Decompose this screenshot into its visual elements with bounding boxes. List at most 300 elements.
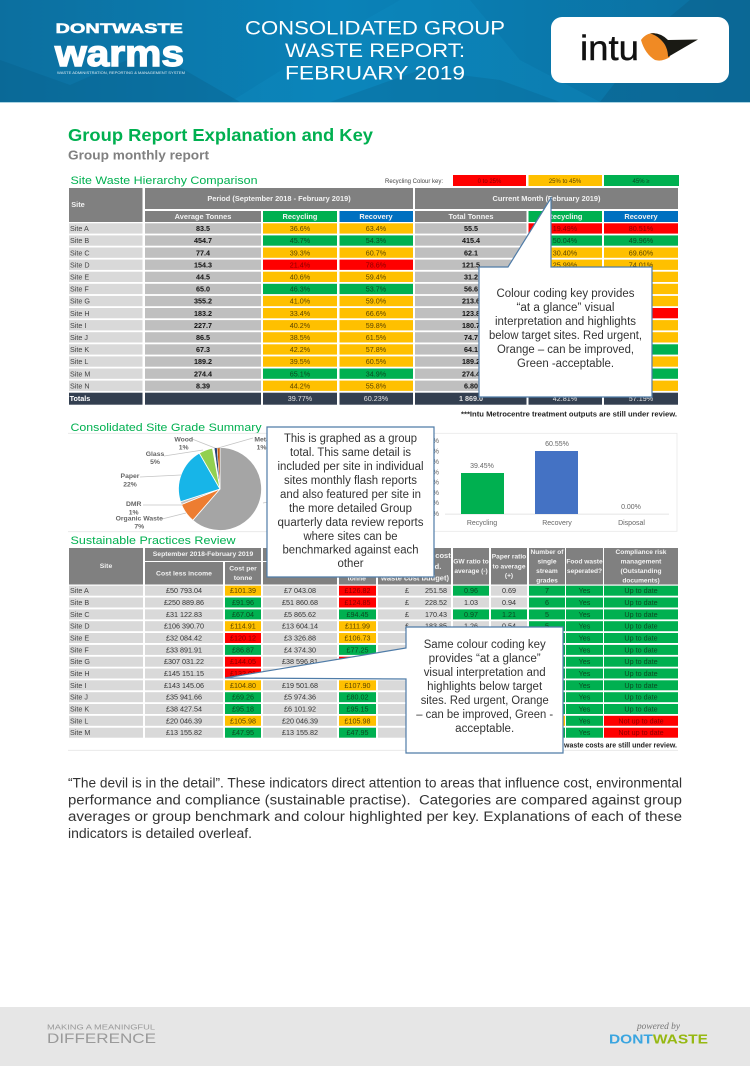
callout: colour coding key bbox=[479, 198, 652, 397]
logo: DONTWASTE WARMS: warms bbox=[54, 33, 184, 74]
rows: site A to site N: 69.60% bbox=[629, 248, 654, 257]
rows: site A to site M: £95.18 bbox=[232, 704, 254, 714]
rows: site A to site N: 59.0% bbox=[366, 297, 387, 306]
rows: site A to site M: £ bbox=[405, 622, 409, 631]
rows: site A to site N: 154.3 bbox=[194, 260, 212, 269]
rows: site A to site M: £50 793.04 bbox=[166, 586, 202, 595]
rows: site A to site N: 19.49% bbox=[553, 224, 578, 233]
powered by DONTWASTE logo: powered by bbox=[636, 1021, 680, 1031]
rows: site A to site M: Yes bbox=[579, 693, 591, 702]
footer tagline: DIFFERENCE bbox=[47, 1030, 156, 1046]
rows: site A to site M: 6 bbox=[545, 598, 549, 607]
powered by DONTWASTE logo: DONT WASTE bbox=[609, 1032, 708, 1046]
rows: site A to site N: Site N bbox=[70, 381, 90, 390]
rows: site A to site M: £106 390.70 bbox=[164, 622, 204, 631]
callout: colour coding key: “at a glance” visual bbox=[516, 302, 614, 314]
footer band bbox=[0, 1007, 750, 1066]
rows: site A to site N: Site F bbox=[70, 285, 89, 294]
pie chart: waste composition: 1% bbox=[257, 444, 266, 452]
rows: site A to site N: 83.5 bbox=[196, 224, 210, 233]
rows: site A to site M: £132.01 bbox=[230, 669, 256, 678]
rows: site A to site M: 228.52 bbox=[425, 598, 447, 607]
rows: site A to site N: Site K bbox=[70, 345, 89, 354]
rows: site A to site M: £126.82 bbox=[345, 586, 370, 595]
rows: site A to site M: Up to date bbox=[624, 693, 658, 702]
rows: site A to site M: 0.94 bbox=[502, 598, 516, 607]
rows: site A to site M: Site H bbox=[70, 669, 90, 678]
rows: site A to site M: £47.95 bbox=[347, 728, 368, 737]
table header: tonne bbox=[234, 575, 252, 582]
rows: site A to site M: £106.73 bbox=[345, 634, 370, 642]
logo: intu bbox=[551, 17, 729, 83]
rows: site A to site N: 38.5% bbox=[290, 333, 311, 342]
rows: site A to site M: £7 043.08 bbox=[284, 586, 316, 595]
rows: site A to site M: £ bbox=[405, 598, 409, 607]
rows: site A to site M: £69.26 bbox=[232, 693, 254, 702]
body paragraph: performance and compliance (sustainable practise). Categories are compared against group bbox=[68, 792, 682, 807]
rows: site A to site M: £144.05 bbox=[230, 657, 256, 666]
rows: site A to site M: £13 155.82 bbox=[166, 728, 202, 737]
body paragraph bbox=[68, 776, 682, 841]
rows: site A to site N: Site H bbox=[70, 309, 90, 318]
rows: site A to site M: £20 046.39 bbox=[166, 716, 202, 725]
rows: site A to site M: £33 891.91 bbox=[166, 645, 202, 654]
section title: sustainable practices: Sustainable Practices Review bbox=[70, 535, 236, 547]
rows: site A to site M: 0.97 bbox=[464, 610, 478, 619]
rows: site A to site M: £124.85 bbox=[345, 598, 370, 607]
section title: site grade summary: Consolidated Site Grade Summary bbox=[70, 422, 262, 434]
rows: site A to site M: £114.91 bbox=[230, 622, 256, 631]
table header: seperated? bbox=[567, 568, 602, 575]
rows: site A to site M: 183.85 bbox=[425, 622, 447, 631]
rows: site A to site M: Up to date bbox=[624, 657, 658, 666]
pie chart: waste composition: Organic Waste bbox=[116, 516, 163, 522]
rows: site A to site N bbox=[69, 223, 678, 391]
rows: site A to site M: £19 501.68 bbox=[282, 681, 318, 690]
rows: site A to site N: 25.99% bbox=[553, 260, 578, 269]
rows: site A to site N: 183.2 bbox=[194, 309, 212, 318]
bar chart: treatment outputs: 10% bbox=[425, 500, 439, 507]
pie chart: waste composition bbox=[116, 436, 272, 530]
rows: site A to site N: 49.96% bbox=[629, 236, 654, 245]
rows: site A to site M: 5 bbox=[545, 622, 549, 631]
rows: site A to site N: Site I bbox=[70, 321, 86, 330]
bar chart: treatment outputs: Recovery bbox=[542, 520, 572, 527]
pie chart: waste composition: 7% bbox=[134, 524, 144, 530]
rows: site A to site N: Site M bbox=[70, 369, 90, 378]
callout: same colour coding key: visual interpretation and bbox=[424, 667, 546, 679]
rows: site A to site N: 39.3% bbox=[290, 248, 311, 257]
rows: site A to site M: Up to date bbox=[624, 598, 658, 607]
rows: site A to site M: £104.80 bbox=[230, 681, 256, 690]
rows: site A to site N: 180.7 bbox=[462, 321, 480, 330]
rows: site A to site N: 86.5 bbox=[196, 333, 210, 342]
rows: site A to site N: 33.4% bbox=[290, 309, 311, 318]
rows: site A to site N: 55.8% bbox=[366, 381, 387, 390]
rows: site A to site N: 50.04% bbox=[553, 236, 578, 245]
recycling colour key: 45% ≥ bbox=[633, 179, 650, 185]
bar chart: treatment outputs: 40% bbox=[425, 470, 439, 476]
pie chart: waste composition: Glass bbox=[146, 451, 164, 458]
rows: site A to site N: 31.2 bbox=[464, 273, 478, 282]
rows: site A to site M: Yes bbox=[579, 669, 591, 678]
powered by DONTWASTE logo bbox=[609, 1021, 708, 1046]
rows: site A to site M: Not up to date bbox=[618, 728, 664, 737]
rows: site A to site M: Site L bbox=[70, 716, 88, 725]
rows: site A to site N: 53.7% bbox=[366, 285, 387, 294]
rows: site A to site N: 44.5 bbox=[196, 273, 210, 282]
rows: site A to site M: Yes bbox=[579, 598, 591, 607]
rows: site A to site N: 65.1% bbox=[290, 369, 311, 378]
table header: to average bbox=[492, 564, 526, 570]
rows: site A to site M: Up to date bbox=[624, 704, 658, 714]
rows: site A to site M: £91.96 bbox=[232, 598, 254, 607]
callout: graphed as group total: total. This same detail is bbox=[290, 447, 411, 459]
rows: site A to site M: Yes bbox=[579, 622, 591, 631]
table header: management bbox=[621, 558, 662, 566]
totals row: 42.81% bbox=[553, 394, 578, 403]
rows: site A to site N: 274.4 bbox=[462, 369, 480, 378]
table header: Recovery bbox=[624, 212, 659, 221]
footnote: waste costs: ***Intu Metrocentre waste costs are still under review. bbox=[499, 742, 677, 750]
callout: graphed as group total: where sites can be bbox=[303, 531, 398, 543]
rows: site A to site N: 59.8% bbox=[366, 321, 387, 330]
table header: Period (September 2018 - February 2019) bbox=[207, 194, 351, 203]
rows: site A to site N: 61.5% bbox=[366, 333, 387, 342]
rows: site A to site M: 5 bbox=[545, 610, 549, 619]
rows: site A to site N: 77.4 bbox=[196, 248, 210, 257]
pie chart: waste composition: 1% bbox=[129, 510, 139, 516]
rows: site A to site M: Up to date bbox=[624, 645, 658, 654]
table header: Site bbox=[71, 200, 85, 209]
rows: site A to site M: £6 101.92 bbox=[284, 704, 316, 714]
callout: colour coding key: Orange – can be improved, bbox=[497, 344, 634, 356]
body paragraph: indicators is detailed overleaf. bbox=[68, 826, 252, 841]
section title: site waste hierarchy: Site Waste Hierarchy Comparison bbox=[70, 175, 258, 187]
report title: WASTE REPORT: bbox=[285, 40, 465, 62]
callout: graphed as group total: benchmarked against each bbox=[282, 545, 418, 557]
rows: site A to site M: Yes bbox=[579, 657, 591, 666]
rows: site A to site M: Yes bbox=[579, 728, 591, 737]
rows: site A to site M: Yes bbox=[579, 716, 591, 725]
rows: site A to site M: Up to date bbox=[624, 622, 658, 631]
callout: colour coding key: Green -acceptable. bbox=[517, 358, 614, 370]
rows: site A to site M: £86.87 bbox=[232, 645, 254, 654]
rows: site A to site N: 415.4 bbox=[462, 236, 480, 245]
table header: Recovery bbox=[359, 212, 394, 221]
rows: site A to site M: £101.39 bbox=[230, 586, 256, 595]
table: site waste hierarchy bbox=[69, 188, 678, 405]
footnote: treatment outputs: ***Intu Metrocentre treatment outputs are still under review. bbox=[461, 412, 677, 418]
bar chart: treatment outputs: Disposal bbox=[618, 520, 645, 527]
rows: site A to site M: Site J bbox=[70, 693, 88, 702]
table header: Paper ratio bbox=[492, 554, 526, 560]
table header: d. bbox=[435, 562, 441, 571]
rows: site A to site M: Yes bbox=[579, 634, 591, 642]
rows: site A to site N: 59.4% bbox=[366, 273, 387, 282]
table header: Food waste bbox=[566, 558, 603, 566]
rows: site A to site N: Site L bbox=[70, 357, 88, 366]
rows: site A to site M: £67.04 bbox=[232, 610, 254, 619]
rows: site A to site N: 46.3% bbox=[290, 285, 311, 294]
recycling colour key: Recycling Colour key: bbox=[385, 179, 443, 185]
callout: same colour coding key: acceptable. bbox=[455, 723, 514, 735]
rows: site A to site M: 170.43 bbox=[425, 610, 447, 619]
report title: FEBRUARY 2019 bbox=[285, 62, 465, 84]
rows: site A to site N: 6.80 bbox=[464, 381, 478, 390]
rows: site A to site M: £4 374.30 bbox=[284, 645, 316, 654]
table header: Cost per bbox=[229, 566, 257, 572]
rows: site A to site N: Site G bbox=[70, 297, 90, 306]
rows: site A to site M: £5 974.36 bbox=[284, 693, 316, 702]
table header: Cost less income bbox=[156, 570, 212, 578]
rows: site A to site N: Site E bbox=[70, 273, 89, 282]
rows: site A to site M: Site D bbox=[70, 622, 90, 631]
rows: site A to site M: £107.90 bbox=[345, 681, 370, 690]
table header: waste cost budget) bbox=[380, 574, 449, 582]
callout: same colour coding key: Same colour coding key bbox=[424, 639, 546, 651]
rows: site A to site M: £ bbox=[405, 586, 409, 595]
rows: site A to site N: 42.2% bbox=[290, 345, 311, 354]
callout: graphed as group total: included per site in individual bbox=[278, 461, 424, 473]
rows: site A to site M: £3 326.88 bbox=[284, 634, 316, 642]
callout: graphed as group total: This is graphed as a group bbox=[284, 433, 417, 445]
rows: site A to site M: Up to date bbox=[624, 634, 658, 642]
logo: intu: intu bbox=[580, 29, 639, 68]
callout: graphed as group total: other bbox=[338, 558, 364, 570]
rows: site A to site M: 0.54 bbox=[502, 622, 516, 631]
bar chart: treatment outputs: 0.00% bbox=[621, 504, 641, 511]
table header: documents) bbox=[622, 578, 660, 584]
rows: site A to site M: 1.03 bbox=[464, 598, 478, 607]
rows: site A to site M: £143 145.06 bbox=[164, 681, 204, 690]
rows: site A to site N: Site B bbox=[70, 236, 89, 245]
rows: site A to site N: 57.8% bbox=[366, 345, 387, 354]
rows: site A to site M: 7 bbox=[545, 586, 549, 595]
subheading: Group monthly report bbox=[68, 148, 210, 162]
table header: Number of bbox=[531, 549, 564, 556]
rows: site A to site N: 36.6% bbox=[290, 224, 311, 233]
callout: graphed as group total: quarterly data review reports bbox=[278, 517, 424, 529]
pie chart: waste composition: 22% bbox=[123, 482, 137, 488]
rows: site A to site N: 60.7% bbox=[366, 248, 387, 257]
rows: site A to site M: Yes bbox=[579, 586, 591, 595]
rows: site A to site N: 78.6% bbox=[366, 260, 387, 269]
rows: site A to site N: 189.2 bbox=[194, 357, 212, 366]
rows: site A to site N: 54.3% bbox=[366, 236, 387, 245]
rows: site A to site M: Site A bbox=[70, 586, 89, 595]
rows: site A to site M: Site E bbox=[70, 634, 89, 642]
callout: graphed as group total: sites monthly flash reports bbox=[284, 475, 417, 487]
bar chart: treatment outputs: 60% bbox=[425, 448, 439, 456]
rows: site A to site N: 30.40% bbox=[553, 248, 578, 257]
rows: site A to site N: 66.6% bbox=[366, 309, 387, 318]
callout: same colour coding key bbox=[225, 627, 563, 753]
table header bbox=[69, 548, 678, 584]
table header: Total Tonnes bbox=[449, 212, 493, 221]
rows: site A to site N: 74.7 bbox=[464, 333, 478, 342]
table header: grades bbox=[536, 578, 558, 584]
logo: DONTWASTE WARMS: DONTWASTE bbox=[56, 20, 183, 36]
body paragraph: averages or group benchmark and colour highlighted per key. Explanations of each of these bbox=[68, 809, 682, 824]
rows: site A to site M: £94.45 bbox=[347, 610, 368, 619]
rows: site A to site N: 39.5% bbox=[290, 357, 311, 366]
report title: CONSOLIDATED GROUP bbox=[245, 18, 505, 40]
totals row: 39.77% bbox=[288, 394, 313, 403]
callout: graphed as group total: the more detailed Group bbox=[289, 503, 412, 515]
table header: Site bbox=[100, 563, 112, 570]
rows: site A to site M: £120.12 bbox=[230, 634, 256, 642]
recycling colour key: 25% to 45% bbox=[549, 179, 582, 185]
rows: site A to site N: 227.7 bbox=[194, 321, 212, 330]
rows: site A to site M: £111.99 bbox=[345, 622, 370, 631]
table header: (Outstanding bbox=[620, 568, 662, 575]
callout: graphed as group total: and also featured per site in bbox=[280, 489, 421, 501]
page heading: Group Report Explanation and Key bbox=[68, 125, 373, 145]
rows: site A to site N: 213.6 bbox=[462, 297, 480, 306]
rows: site A to site N: Site C bbox=[70, 248, 90, 257]
bar chart: treatment outputs: 0% bbox=[429, 511, 439, 518]
rows: site A to site M: Yes bbox=[579, 681, 591, 690]
rows: site A to site M: £38 596.81 bbox=[282, 657, 318, 666]
rows: site A to site M: £105.98 bbox=[345, 716, 370, 725]
rows: site A to site N: 44.2% bbox=[290, 381, 311, 390]
rows: site A to site N: 123.8 bbox=[462, 309, 480, 318]
rows: site A to site N: 62.1 bbox=[464, 248, 478, 257]
rows: site A to site M: Site M bbox=[70, 728, 90, 737]
totals row: 57.19% bbox=[629, 394, 654, 403]
rows: site A to site M: £5 865.62 bbox=[284, 610, 316, 619]
rows: site A to site N: 55.5 bbox=[464, 224, 478, 233]
rows: site A to site N: 67.3 bbox=[196, 345, 210, 354]
totals row: 60.23% bbox=[364, 394, 389, 403]
rows: site A to site M: 251.58 bbox=[425, 586, 447, 595]
rows: site A to site M: £38 427.54 bbox=[166, 704, 202, 714]
header banner bbox=[0, 0, 750, 103]
rows: site A to site N: Site D bbox=[70, 260, 90, 269]
pie chart: waste composition: 1% bbox=[179, 444, 189, 452]
rows: site A to site N: 121.5 bbox=[462, 260, 480, 269]
logo: DONTWASTE WARMS bbox=[54, 20, 185, 75]
callout: colour coding key: Colour coding key provides bbox=[496, 288, 635, 300]
rows: site A to site M: 0.69 bbox=[502, 586, 516, 595]
rows: site A to site M: £13 604.14 bbox=[282, 622, 318, 631]
table header: Current Month (February 2019) bbox=[492, 194, 601, 203]
rows: site A to site M: £31 122.83 bbox=[166, 610, 202, 619]
rows: site A to site N: 274.4 bbox=[194, 369, 212, 378]
rows: site A to site M: Site F bbox=[70, 645, 89, 654]
table header: Compliance risk bbox=[616, 549, 667, 556]
rows: site A to site M: £20 046.39 bbox=[282, 716, 318, 725]
table header: single bbox=[537, 558, 557, 566]
rows: site A to site N: 41.0% bbox=[290, 297, 311, 306]
pie chart: waste composition: DMR bbox=[126, 501, 142, 508]
rows: site A to site M: Up to date bbox=[624, 586, 658, 595]
rows: site A to site M: Site C bbox=[70, 610, 90, 619]
rows: site A to site N: 63.4% bbox=[366, 224, 387, 233]
callout: colour coding key: interpretation and highlights bbox=[495, 316, 636, 328]
rows: site A to site N: Site A bbox=[70, 224, 89, 233]
rows: site A to site N: 40.2% bbox=[290, 321, 311, 330]
rows: site A to site M: Yes bbox=[579, 610, 591, 619]
totals row: Totals bbox=[70, 394, 90, 403]
table header: Recycling bbox=[548, 212, 583, 221]
rows: site A to site M: Up to date bbox=[624, 669, 658, 678]
rows: site A to site N: 8.39 bbox=[196, 381, 210, 390]
pie chart: waste composition: Wood bbox=[174, 436, 193, 444]
bar chart: treatment outputs: 30% bbox=[425, 480, 439, 486]
rows: site A to site M: £145 151.15 bbox=[164, 669, 204, 678]
bar chart: treatment outputs: 39.45% bbox=[470, 463, 494, 470]
rows: site A to site N: 454.7 bbox=[194, 236, 212, 245]
rows: site A to site N: 65.0 bbox=[196, 285, 210, 294]
rows: site A to site M: Yes bbox=[579, 704, 591, 714]
bar chart: treatment outputs: 70% bbox=[425, 438, 439, 445]
table header bbox=[69, 188, 678, 222]
report title bbox=[245, 18, 505, 84]
rows: site A to site M: £250 889.86 bbox=[164, 598, 204, 607]
pie chart: waste composition: Paper bbox=[121, 473, 140, 480]
footer tagline: MAKING A MEANINGFUL bbox=[47, 1022, 156, 1032]
rows: site A to site M: Site B bbox=[70, 598, 89, 607]
bar chart: treatment outputs: Recycling bbox=[467, 520, 497, 527]
callout: graphed as group total bbox=[267, 427, 434, 577]
rows: site A to site N: 60.5% bbox=[366, 357, 387, 366]
rows: site A to site M bbox=[69, 586, 678, 738]
rows: site A to site M: £32 084.42 bbox=[166, 634, 202, 642]
totals row: 1 869.0 bbox=[459, 394, 483, 403]
pie chart: waste composition: Metal bbox=[254, 436, 272, 444]
rows: site A to site N: 34.9% bbox=[366, 369, 387, 378]
rows: site A to site M: 1.26 bbox=[464, 622, 478, 631]
logo: DONTWASTE WARMS: WASTE ADMINISTRATION, REPORTING & MANAGEMENT SYSTEM bbox=[57, 70, 185, 75]
rows: site A to site M: 1.21 bbox=[502, 610, 516, 619]
pie chart: waste composition: 5% bbox=[150, 459, 160, 466]
rows: site A to site M: Up to date bbox=[624, 610, 658, 619]
bar chart: treatment outputs: 60.55% bbox=[545, 441, 569, 448]
rows: site A to site M: Site K bbox=[70, 704, 89, 714]
recycling colour key bbox=[385, 175, 679, 186]
bar chart: treatment outputs bbox=[425, 433, 677, 531]
rows: site A to site M: £47.95 bbox=[232, 728, 254, 737]
rows: site A to site M: Yes bbox=[579, 645, 591, 654]
footer tagline bbox=[47, 1022, 156, 1046]
rows: site A to site M: Up to date bbox=[624, 681, 658, 690]
rows: site A to site M: £35 941.66 bbox=[166, 693, 202, 702]
rows: site A to site N: Site J bbox=[70, 333, 88, 342]
rows: site A to site M: £307 031.22 bbox=[164, 657, 204, 666]
table header: GW ratio to bbox=[453, 558, 489, 566]
rows: site A to site M: 0.96 bbox=[464, 586, 478, 595]
rows: site A to site N: 21.4% bbox=[290, 260, 311, 269]
callout: same colour coding key: provides “at a glance” bbox=[429, 653, 541, 665]
rows: site A to site N: 189.2 bbox=[462, 357, 480, 366]
rows: site A to site M: £105.98 bbox=[230, 716, 256, 725]
totals row bbox=[69, 393, 678, 405]
rows: site A to site M: Site G bbox=[70, 657, 90, 666]
rows: site A to site M: Site I bbox=[70, 681, 86, 690]
rows: site A to site N: 74.01% bbox=[629, 260, 654, 269]
body paragraph: “The devil is in the detail”. These indicators direct attention to areas that influence cost, environmental bbox=[68, 776, 682, 790]
rows: site A to site M: £80.02 bbox=[347, 693, 368, 702]
table header: average (-) bbox=[454, 568, 488, 575]
table header: Recycling bbox=[283, 212, 318, 221]
rows: site A to site N: 45.7% bbox=[290, 236, 311, 245]
table: sustainable practices bbox=[69, 548, 678, 738]
rows: site A to site M: £51 860.68 bbox=[282, 598, 318, 607]
bar chart: treatment outputs: 50% bbox=[425, 459, 439, 466]
table header: September 2018-February 2019 bbox=[153, 551, 253, 558]
